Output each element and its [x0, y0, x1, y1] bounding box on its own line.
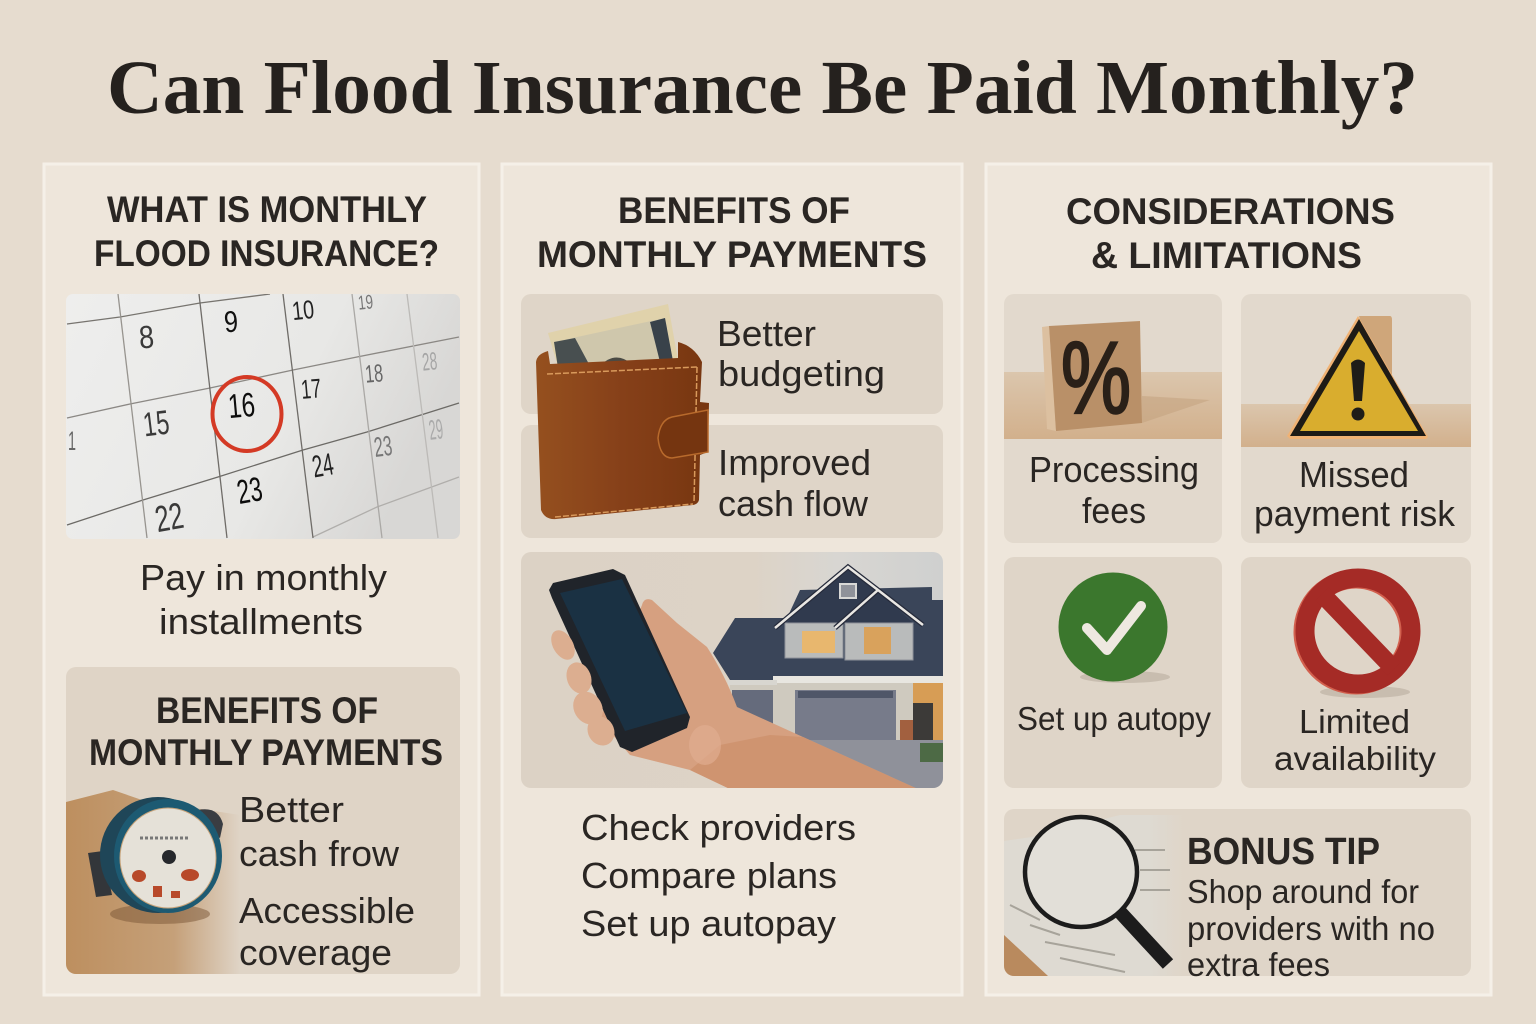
icon: leather wallet with cash [536, 304, 709, 519]
text: limited availability: Limited [1299, 703, 1410, 740]
card: limited availability [1241, 557, 1471, 788]
hand and arm [600, 599, 920, 790]
card: benefits of monthly payments [66, 667, 460, 974]
title: Can Flood Insurance Be Paid Monthly? [107, 46, 1418, 130]
text: check providers list: Check providers [581, 807, 856, 848]
text: check providers list: Compare plans [581, 855, 837, 896]
text: pay in monthly installments [140, 557, 387, 642]
panel: what is monthly flood insurance [44, 164, 479, 995]
text: improved cash flow: Improved [718, 442, 871, 483]
text: accessible coverage [239, 890, 415, 973]
calendar photo: 18 [364, 359, 384, 389]
text: pay in monthly installments: Pay in monthly [140, 557, 387, 598]
text: pay in monthly installments: installments [159, 601, 363, 642]
image: hand holding phone with house [521, 552, 943, 790]
calendar photo: 15 [141, 404, 171, 444]
calendar photo: 23 [372, 430, 394, 463]
text: better cash frow [239, 789, 400, 874]
panel: benefits of monthly payments [502, 164, 962, 995]
text: limited availability: availability [1274, 740, 1437, 777]
text: improved cash flow [718, 442, 871, 524]
calendar photo: 1 [68, 426, 76, 456]
card: missed payment risk [1241, 294, 1471, 543]
text: processing fees [1029, 449, 1199, 531]
text: missed payment risk: Missed [1299, 454, 1409, 495]
calendar photo: 24 [309, 446, 336, 484]
calendar photo: 22 [152, 495, 187, 540]
icon: meter on wooden table [66, 790, 240, 974]
heading: what is monthly flood insurance: WHAT IS MONTHLY [107, 189, 427, 230]
calendar date circled: 16 [226, 386, 257, 426]
text: better budgeting: Better [717, 313, 816, 354]
heading: benefits of monthly payments [537, 190, 927, 275]
heading: benefits: MONTHLY PAYMENTS [89, 732, 443, 773]
panel: considerations and limitations [986, 164, 1491, 995]
heading: benefits of monthly payments: MONTHLY PAYMENTS [537, 234, 927, 275]
text: better cash frow: Better [239, 789, 344, 830]
text: limited availability [1274, 703, 1437, 777]
fingers [551, 630, 614, 746]
text: better budgeting: budgeting [718, 353, 885, 394]
icon: no sign [1303, 578, 1411, 698]
text: bonus tip: Shop around for [1187, 873, 1419, 910]
calendar photo: 8 [138, 318, 155, 355]
calendar photo: 17 [300, 373, 322, 405]
card: processing fees [1004, 294, 1222, 543]
calendar photo: 9 [223, 305, 239, 339]
icon: percent block: % [1061, 321, 1131, 435]
text: missed payment risk: payment risk [1254, 493, 1456, 534]
text: bonus tip: extra fees [1187, 946, 1330, 983]
text: bonus tip: providers with no [1187, 910, 1435, 947]
text: accessible coverage: coverage [239, 932, 392, 973]
smartphone [549, 569, 690, 752]
text: accessible coverage: Accessible [239, 890, 415, 931]
text: check providers list: Set up autopay [581, 903, 836, 944]
house [713, 567, 943, 788]
heading: what is monthly flood insurance [94, 189, 439, 274]
icon: warning triangle [1241, 316, 1471, 447]
text: bonus tip: BONUS TIP [1187, 831, 1380, 873]
calendar date circled [212, 377, 282, 451]
card: bonus tip [1004, 809, 1471, 983]
text: processing fees: fees [1082, 490, 1146, 531]
heading: benefits: BENEFITS OF [156, 690, 378, 731]
heading: benefits of monthly payments: BENEFITS OF [618, 190, 850, 231]
heading: considerations and limitations [1066, 191, 1395, 276]
calendar photo: 10 [290, 294, 316, 326]
text: processing fees: Processing [1029, 449, 1199, 490]
card: improved cash flow [521, 425, 943, 538]
text: check providers list [581, 807, 856, 944]
icon: percent block [1004, 321, 1222, 439]
icon: green check [1058, 572, 1170, 683]
text: better cash frow: cash frow [239, 833, 400, 874]
calendar photo: 29 [427, 413, 445, 446]
heading: what is monthly flood insurance: FLOOD INSURANCE? [94, 233, 439, 274]
calendar photo [66, 291, 460, 540]
card: set up autopay [1004, 557, 1222, 788]
heading: considerations and limitations: & LIMITATIONS [1091, 235, 1362, 276]
heading: considerations and limitations: CONSIDERATIONS [1066, 191, 1395, 232]
calendar photo: 19 [357, 291, 374, 315]
icon: magnifying glass on paper [1004, 815, 1184, 976]
heading: benefits [89, 690, 443, 773]
text: improved cash flow: cash flow [718, 483, 869, 524]
text: set up autopy: Set up autopy [1017, 700, 1211, 737]
text: better budgeting [717, 313, 885, 394]
calendar photo: 23 [234, 470, 265, 512]
text: missed payment risk [1254, 454, 1456, 534]
calendar photo: 28 [421, 347, 438, 377]
text: bonus tip [1187, 831, 1435, 983]
card: better budgeting [521, 294, 943, 414]
